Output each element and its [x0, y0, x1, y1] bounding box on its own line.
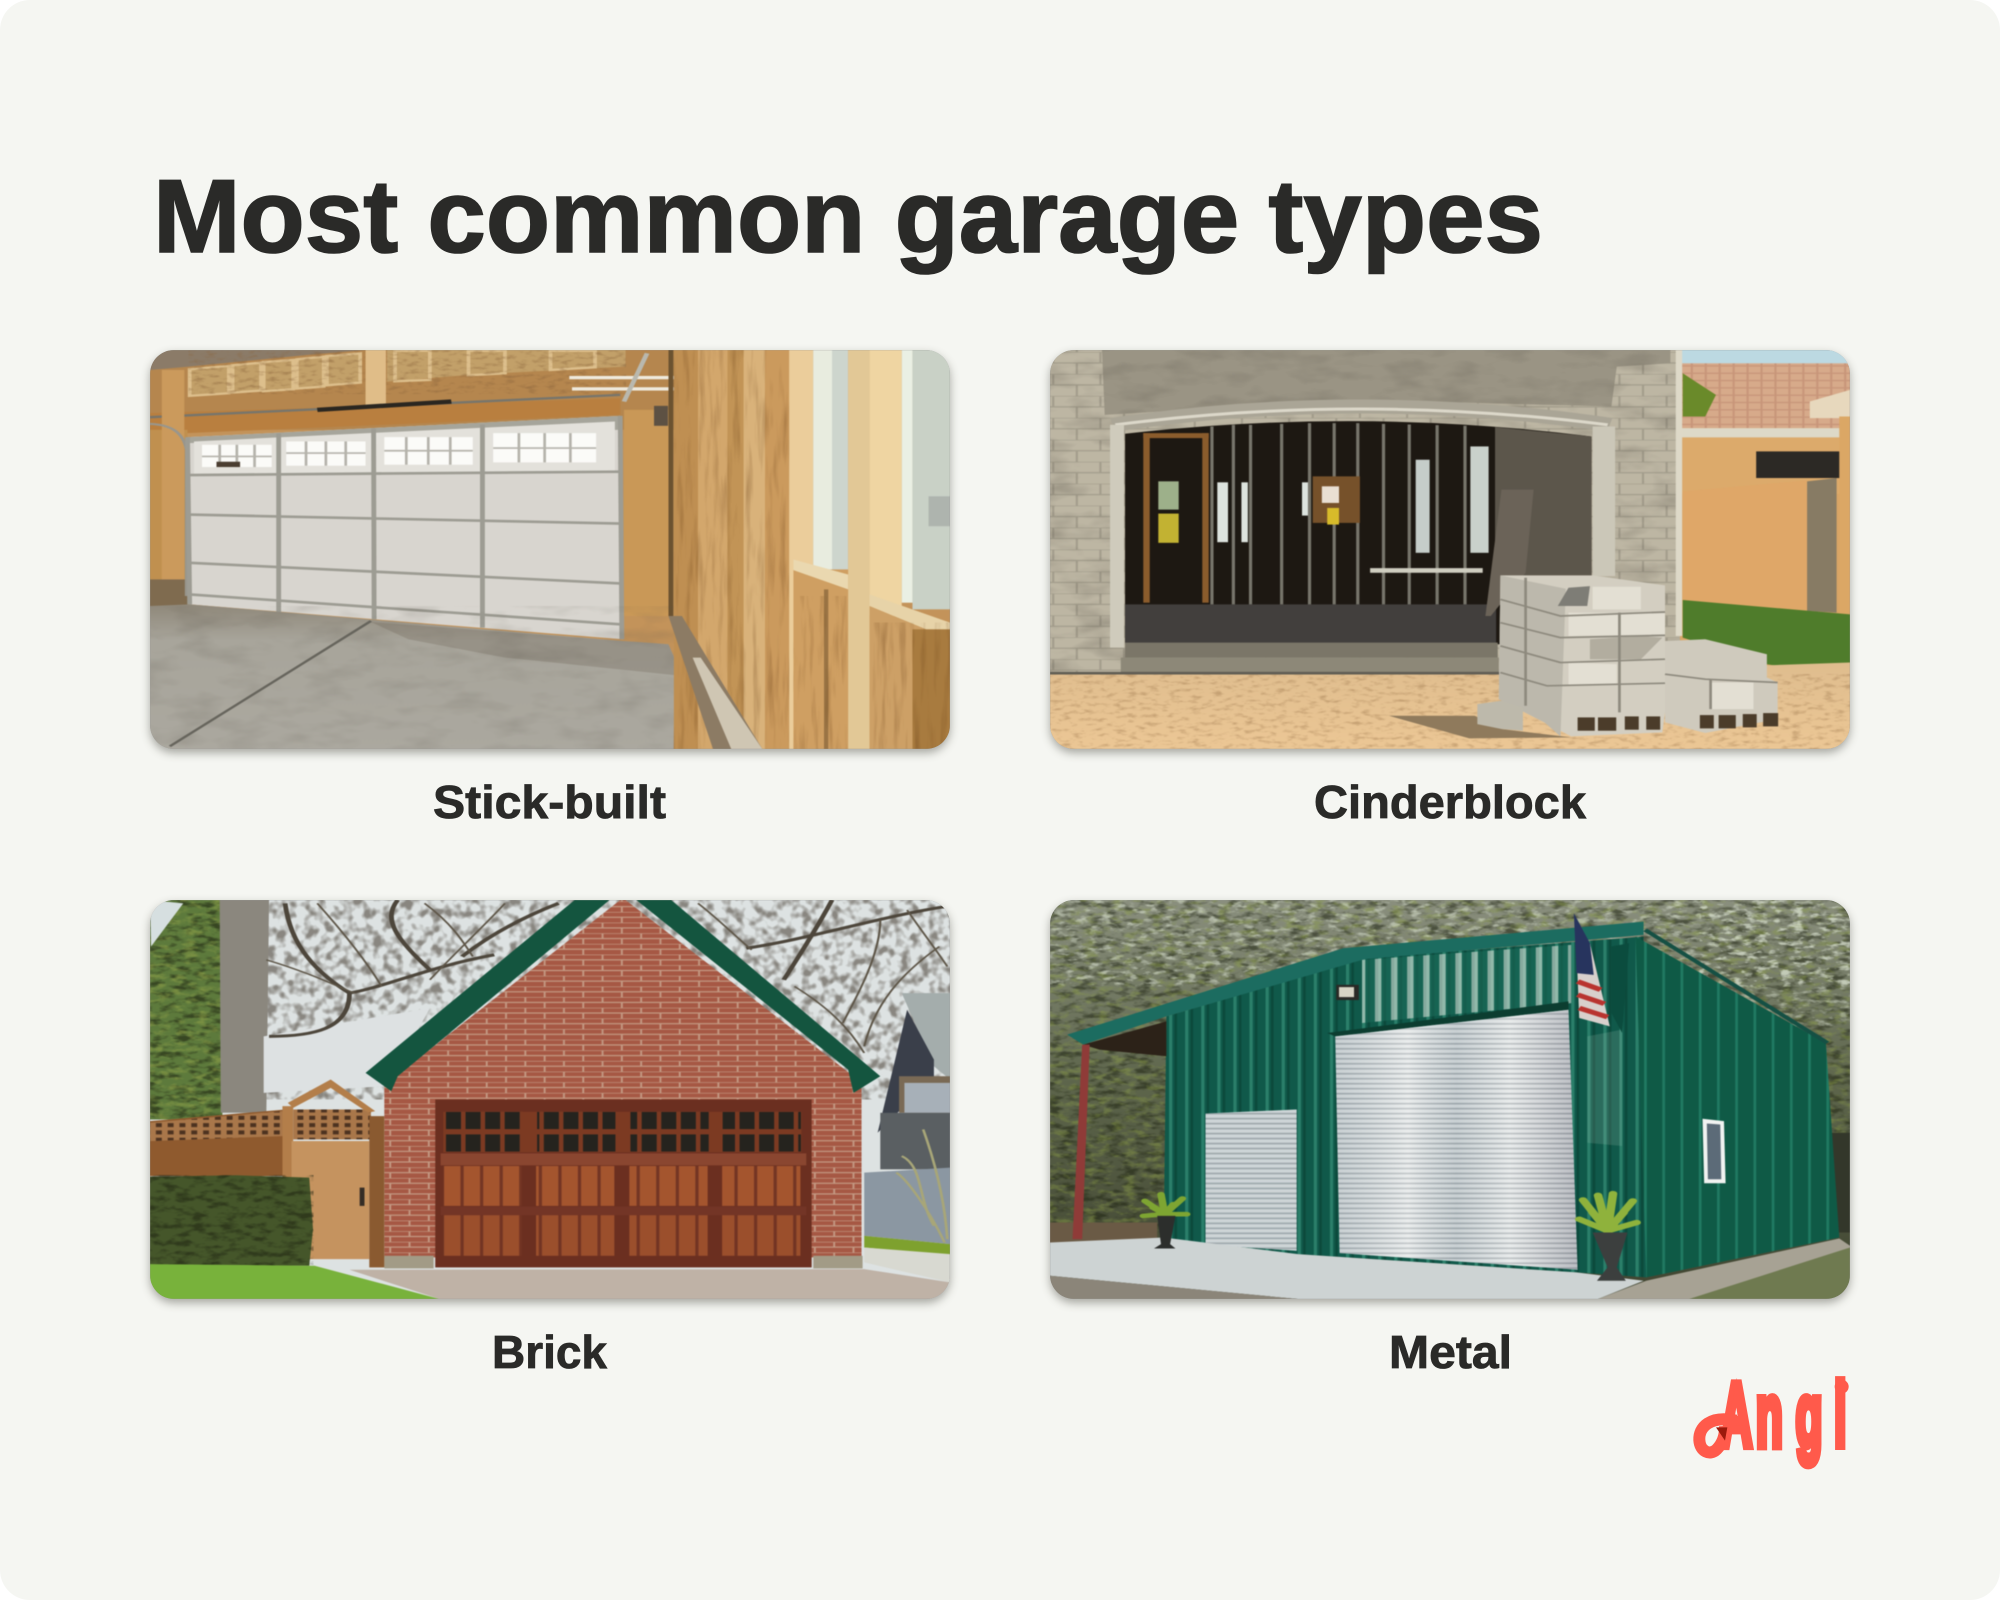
- logo: Angi: g: [1796, 1366, 1823, 1466]
- neighbouring house: [1673, 350, 1850, 678]
- logo: Angi: A: [1720, 1366, 1752, 1466]
- label: brick: Brick: [492, 1326, 607, 1378]
- label: metal: Metal: [1389, 1326, 1512, 1378]
- photo: brick garage with wooden door: [150, 900, 950, 1299]
- photo: cinderblock garage under construction: [1050, 350, 1850, 749]
- wall light: [1336, 985, 1359, 1000]
- panel: stick-built garage: [144, 348, 956, 828]
- side window: [1703, 1119, 1726, 1183]
- logo: Angi: i: [1834, 1366, 1846, 1466]
- open garage interior: [1121, 421, 1592, 673]
- cinder block stack: [1477, 575, 1778, 736]
- title: Most common garage types: [153, 159, 1543, 275]
- forest background: [1050, 900, 1850, 1242]
- canopy and post: [1073, 1021, 1166, 1239]
- panel: cinderblock garage: [1044, 348, 1856, 828]
- sand ground: [1050, 663, 1850, 749]
- right planter: [1579, 1194, 1637, 1281]
- roof edge: [1067, 922, 1644, 1045]
- wooden garage door: [435, 1100, 812, 1267]
- block wall: [1050, 350, 1682, 674]
- small roller door: [1205, 1109, 1297, 1251]
- brick gable and wall: [366, 900, 880, 1268]
- lawn: [150, 1264, 440, 1299]
- front wall: [1164, 937, 1646, 1277]
- gravel and grass: [1050, 1238, 1850, 1299]
- garage door: [188, 416, 623, 639]
- hedge: [150, 1175, 313, 1266]
- upper wall and OSB sheathing: [150, 350, 677, 433]
- label: stick-built: Stick-built: [433, 776, 666, 828]
- wooden fence and gate: [150, 1080, 384, 1267]
- upper sheen: [1362, 945, 1571, 1023]
- large roller door: [1327, 1001, 1578, 1270]
- logo: Angi: n: [1756, 1366, 1783, 1466]
- logo: Angi: [1693, 1366, 1849, 1470]
- panel: brick garage: [144, 898, 956, 1378]
- side wall: [1636, 937, 1839, 1277]
- floor: [150, 604, 714, 749]
- left planter: [1143, 1194, 1187, 1248]
- label: cinderblock: Cinderblock: [1314, 776, 1586, 828]
- concrete pad: [1050, 1237, 1644, 1299]
- driveway: [349, 1269, 950, 1299]
- photo: stick-built garage interior: [150, 350, 950, 749]
- photo: green metal garage: [1050, 900, 1850, 1299]
- framed wall: [668, 350, 950, 749]
- panel: metal garage: [1044, 898, 1856, 1378]
- trees and sky: [150, 900, 950, 1119]
- neighbouring house: [864, 993, 950, 1282]
- flags: [1574, 913, 1629, 1033]
